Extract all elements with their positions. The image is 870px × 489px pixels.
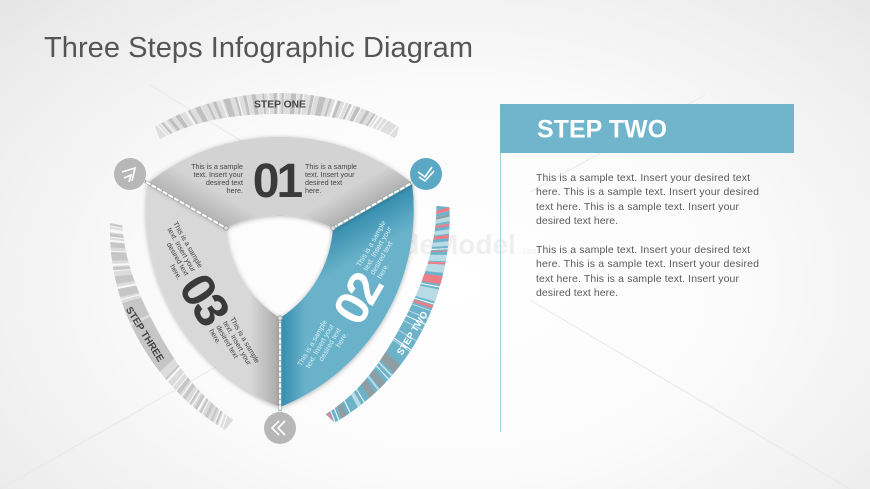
text 02 upper: desired text — [368, 240, 394, 276]
title: Three Steps Infographic Diagram — [44, 32, 473, 64]
paragraph 1 — [536, 172, 759, 227]
paragraph 2: This is a sample text. Insert your desired text — [536, 244, 750, 256]
band: step three — [110, 223, 233, 430]
text 01 left: This is a sample — [191, 162, 243, 171]
icon: down-right chevrons — [410, 158, 442, 190]
text 01 right: This is a sample — [305, 162, 357, 171]
paragraph 1: desired text here. — [536, 215, 618, 227]
segment 1 — [148, 137, 412, 228]
panel header — [500, 104, 794, 153]
text 01 right: here. — [305, 186, 321, 195]
text 03 lower: This is a sample — [228, 315, 262, 365]
text 01 right: text. Insert your — [305, 170, 355, 179]
ring diagram — [141, 137, 415, 415]
segment 3 — [146, 183, 280, 407]
dashed seam left — [141, 179, 228, 230]
text 01 left: desired text — [206, 178, 243, 187]
dashed seam bottom — [278, 316, 282, 415]
paragraph 2: desired text here. — [536, 287, 618, 299]
text 02 upper: This is a sample — [354, 219, 388, 268]
text 02 upper: here. — [375, 262, 391, 280]
text 02 lower: text. Insert your — [303, 322, 336, 370]
label: step three: STEP THREE — [123, 305, 166, 364]
segment 2 — [280, 183, 414, 407]
text 03 lower: desired text — [214, 323, 241, 360]
number 01: 01 — [253, 155, 302, 208]
text 03 upper: here. — [168, 263, 184, 281]
text 03 lower: text. Insert your — [221, 319, 254, 367]
panel: step two details — [500, 104, 794, 432]
panel rule — [500, 153, 502, 432]
text 01 left: here. — [227, 186, 243, 195]
text 01 left: text. Insert your — [193, 170, 244, 179]
text 02 lower: here. — [334, 330, 350, 349]
dashed seam right — [331, 181, 415, 230]
band: step one — [163, 100, 397, 152]
number 03: 03 — [168, 265, 239, 335]
band: step two — [326, 206, 450, 422]
number 02: 02 — [324, 265, 394, 334]
paragraph 2 — [536, 244, 759, 299]
text 02 lower: desired text — [316, 326, 343, 363]
text 01 right: desired text — [305, 178, 342, 187]
text 03 lower: here. — [207, 327, 223, 346]
watermark: .com — [520, 246, 540, 256]
text 03 upper: text. Insert your — [165, 226, 198, 274]
paragraph 1: text here. This is a sample text. Insert your — [536, 201, 740, 213]
paragraph 1: This is a sample text. Insert your desired text — [536, 172, 750, 184]
text 02 upper: text. Insert your — [361, 224, 394, 272]
label: step one: STEP ONE — [254, 100, 306, 110]
watermark: SlideModel — [368, 229, 516, 260]
label: step two: STEP TWO — [395, 310, 431, 357]
panel heading: STEP TWO — [537, 116, 667, 144]
text 03 upper: This is a sample — [171, 220, 205, 269]
text 03 upper: desired text — [165, 241, 191, 277]
paragraph 2: here. This is a sample text. Insert your desired — [536, 258, 759, 270]
icon: up-right chevrons — [114, 158, 146, 190]
icon: left chevrons — [264, 412, 296, 444]
paragraph 1: here. This is a sample text. Insert your desired — [536, 186, 759, 198]
paragraph 2: text here. This is a sample text. Insert your — [536, 273, 740, 285]
text 02 lower: This is a sample — [295, 318, 329, 368]
